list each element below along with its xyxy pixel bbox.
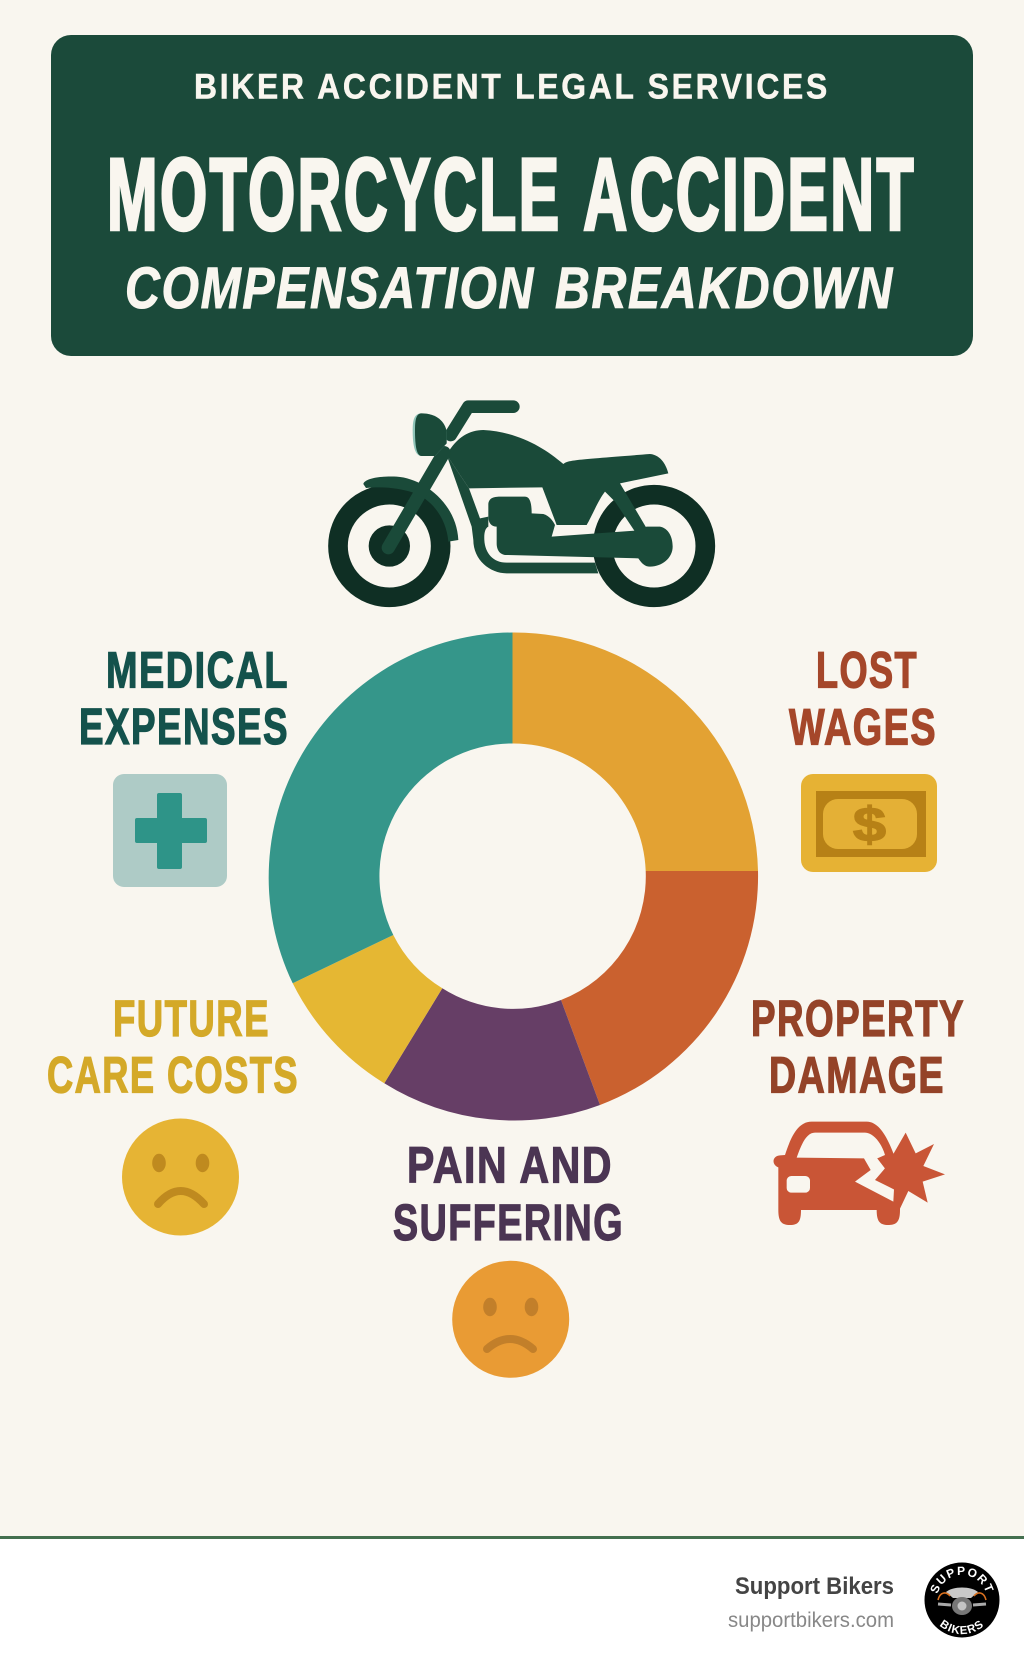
bike frame and body	[363, 407, 673, 573]
rear wheel	[603, 495, 705, 597]
logo badge: SUPPORT	[930, 1566, 994, 1593]
label: lost wages: LOST	[816, 642, 918, 698]
icon: medical cross	[113, 774, 227, 887]
label: medical expenses: MEDICAL	[106, 642, 289, 698]
front wheel	[338, 495, 441, 597]
footer brand name: Support Bikers	[735, 1573, 894, 1600]
label: future care costs	[47, 990, 299, 1104]
segment: medical expenses	[269, 632, 512, 983]
icon: sad face orange	[452, 1261, 569, 1378]
donut chart	[269, 632, 758, 1121]
segment: property damage	[561, 871, 758, 1105]
eyebrow heading: BIKER ACCIDENT LEGAL SERVICES	[194, 68, 830, 106]
icon: sad face yellow	[122, 1118, 239, 1236]
icon: banknote	[801, 774, 937, 872]
dollar sign: $	[853, 799, 886, 852]
segment: pain and suffering	[384, 988, 600, 1121]
footer	[0, 1536, 1024, 1666]
label: future care costs: CARE COSTS	[47, 1046, 299, 1104]
label: future care costs: FUTURE	[113, 990, 270, 1047]
label: property damage: DAMAGE	[769, 1046, 945, 1104]
label: property damage	[751, 990, 965, 1104]
label: medical expenses	[79, 642, 289, 755]
logo badge	[924, 1562, 1000, 1638]
header panel	[51, 35, 973, 356]
segment: future care costs	[293, 935, 442, 1083]
segment: lost wages	[512, 632, 758, 871]
label: pain and suffering: SUFFERING	[393, 1194, 624, 1251]
icon: motorcycle	[338, 407, 705, 597]
icon: crashed car	[774, 1122, 945, 1225]
label: pain and suffering	[393, 1136, 624, 1251]
label: lost wages	[789, 642, 937, 756]
label: lost wages: WAGES	[789, 698, 937, 756]
logo badge: BIKERS	[940, 1620, 983, 1634]
label: pain and suffering: PAIN AND	[407, 1136, 613, 1194]
label: medical expenses: EXPENSES	[79, 698, 289, 755]
footer website: supportbikers.com	[728, 1609, 894, 1632]
italic subtitle: COMPENSATION BREAKDOWN	[125, 256, 894, 321]
